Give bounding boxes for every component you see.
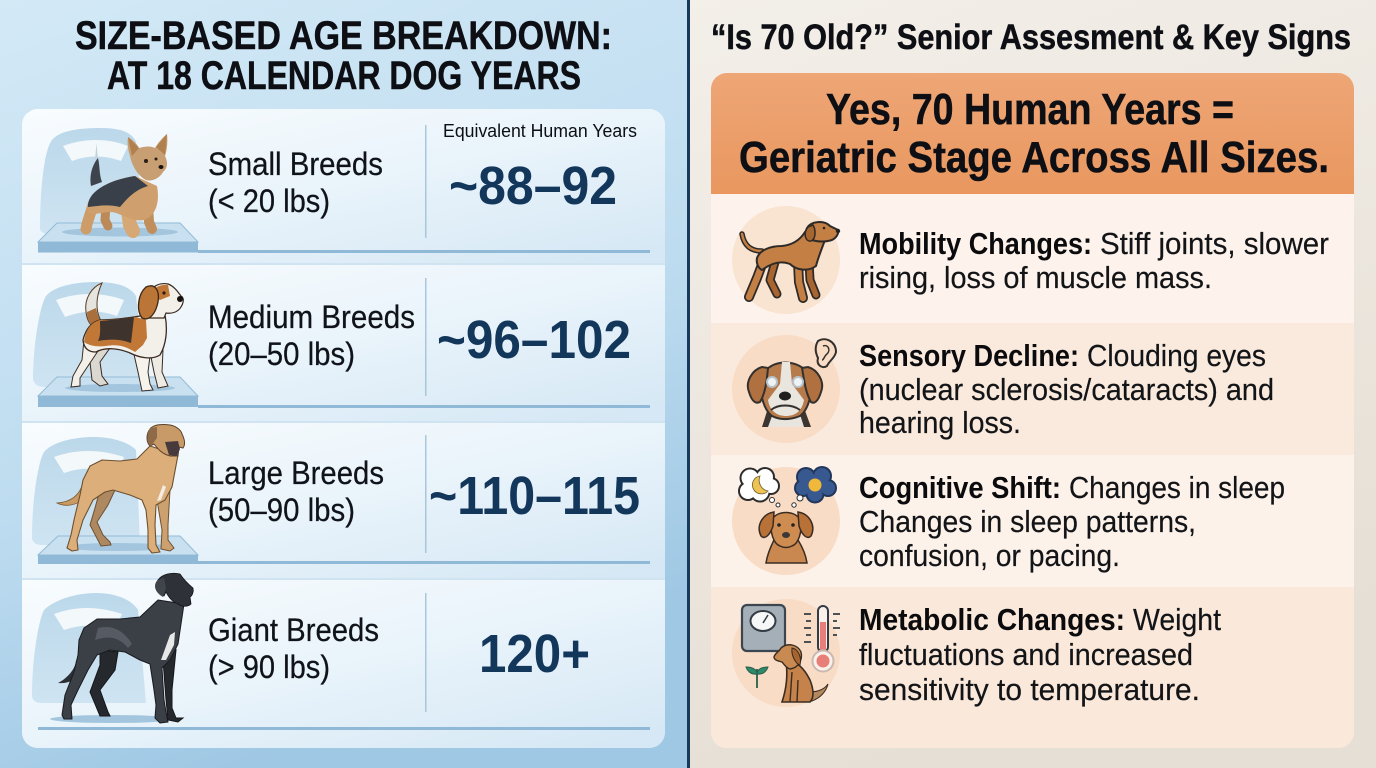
description: Changes in sleep patterns, — [859, 504, 1196, 539]
center divider — [687, 0, 690, 768]
left heading: AT 18 CALENDAR DOG YEARS — [107, 54, 581, 98]
row: sensory decline — [732, 335, 1274, 443]
breed label: Medium Breeds — [208, 299, 415, 335]
description: Weight — [1133, 602, 1221, 637]
panel: senior assessment — [711, 73, 1354, 748]
breed label: Large Breeds — [208, 455, 384, 491]
human years value: 120+ — [479, 624, 590, 684]
panel: breed size table — [22, 109, 665, 748]
row: large breeds: (50–90 lbs) — [208, 492, 355, 528]
description: hearing loss. — [859, 405, 1021, 440]
description: Stiff joints, slower — [1100, 226, 1329, 261]
left heading — [75, 14, 612, 98]
description: rising, loss of muscle mass. — [859, 260, 1212, 295]
description — [859, 602, 1221, 707]
description: sensitivity to temperature. — [859, 672, 1200, 707]
description: (nuclear sclerosis/cataracts) and — [859, 372, 1274, 407]
description: Sensory Decline: — [859, 338, 1079, 373]
description: Clouding eyes — [1087, 338, 1266, 373]
row: small breeds: (< 20 lbs) — [208, 183, 330, 219]
icon: scale with mastiff — [32, 424, 198, 564]
breed label: Small Breeds — [208, 146, 383, 182]
icon: scale with beagle — [33, 282, 198, 407]
description: Changes in sleep — [1069, 470, 1285, 505]
description: Metabolic Changes: — [859, 602, 1125, 637]
row: large breeds — [32, 424, 640, 564]
left background — [0, 0, 687, 768]
icon: standing dog — [732, 206, 840, 314]
icon: dog with clouded eyes and ear — [732, 335, 840, 443]
description — [859, 226, 1329, 295]
row: medium breeds — [33, 282, 631, 407]
icon: scale with yorkshire terrier — [38, 128, 198, 252]
right background — [690, 0, 1376, 768]
icon: scale, thermometer, seedling and sitting dog — [732, 599, 840, 707]
description: Mobility Changes: — [859, 226, 1092, 261]
description: fluctuations and increased — [859, 637, 1193, 672]
row: small breeds — [38, 128, 617, 252]
row: cognitive shift — [732, 466, 1285, 575]
description — [859, 470, 1285, 573]
left heading: SIZE-BASED AGE BREAKDOWN: — [75, 14, 612, 58]
row: giant breeds: (> 90 lbs) — [208, 649, 330, 685]
row: metabolic changes — [732, 599, 1221, 707]
description: Cognitive Shift: — [859, 470, 1061, 505]
human years value: ~110–115 — [429, 466, 640, 526]
human years value: ~96–102 — [437, 310, 631, 370]
breed label: Giant Breeds — [208, 612, 379, 648]
callout: geriatric stage: Yes, 70 Human Years = — [826, 85, 1234, 134]
row: mobility changes — [732, 206, 1329, 314]
human years value: ~88–92 — [449, 156, 617, 216]
description — [859, 338, 1274, 440]
row: medium breeds: (20–50 lbs) — [208, 336, 355, 372]
icon: scale with great dane — [32, 573, 193, 723]
row: giant breeds — [32, 573, 590, 723]
callout: geriatric stage — [739, 85, 1329, 182]
icon: dog with moon and sun thought clouds — [732, 466, 840, 575]
column header: equivalent human years: Equivalent Human Years — [443, 121, 637, 141]
description: confusion, or pacing. — [859, 538, 1120, 573]
